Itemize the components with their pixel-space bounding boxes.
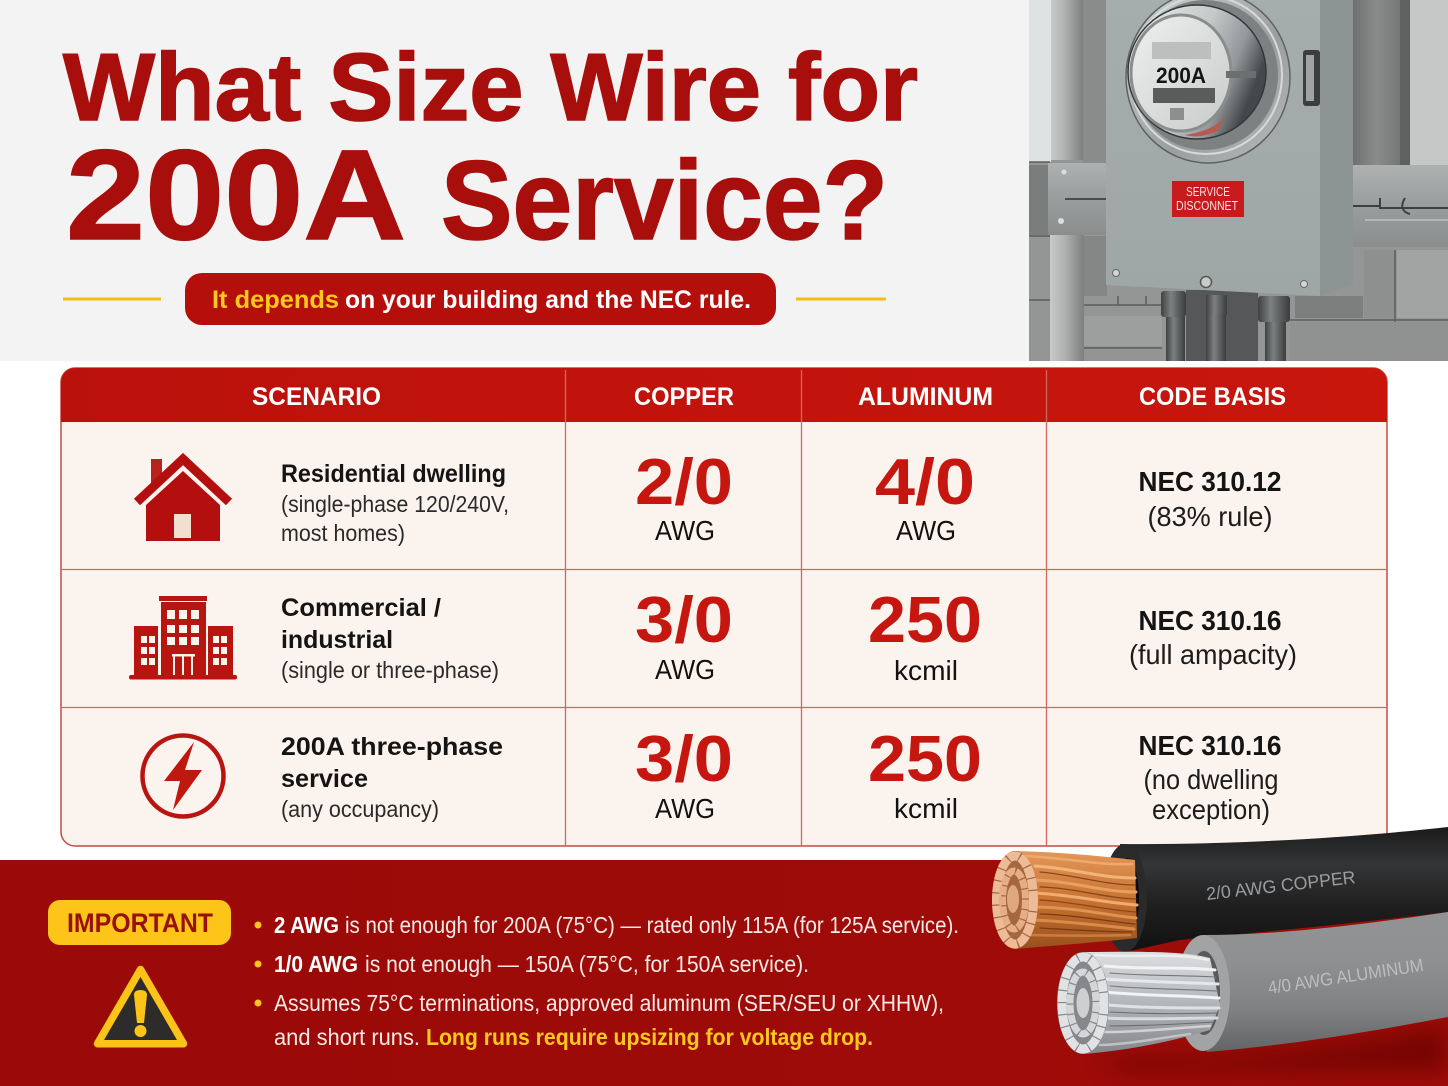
table [61,368,1387,846]
latch [1303,50,1320,106]
row: residential dwelling: (83% rule) [1148,501,1272,532]
important notes list: is not enough for 200A (75°C) — rated only 115A (for 125A service). [345,912,959,938]
cable: 4/0 AWG aluminum [1057,912,1448,1054]
row: commercial / industrial: 250 [868,583,982,656]
row: commercial / industrial: kcmil [894,655,958,686]
important notes list: is not enough — 150A (75°C, for 150A service). [365,951,809,977]
row: 200A three-phase service: exception) [1152,794,1270,825]
row: commercial / industrial: industrial [281,626,393,654]
important badge: IMPORTANT [67,908,213,938]
important notes list: 1/0 AWG [274,951,358,977]
row: 200A three-phase service: 250 [868,722,982,795]
title: 200A [66,124,406,267]
row: 200A three-phase service: AWG [655,793,715,824]
row: residential dwelling: AWG [896,515,956,546]
photo: 200A meter and service disconnect: 200A [1156,63,1206,88]
row: commercial / industrial: (single or three-phase) [281,657,499,683]
row: 200A three-phase service: (no dwelling [1144,764,1278,795]
subtitle pill [63,273,886,325]
important notes list: 2 AWG [274,912,339,938]
subtitle pill: It depends [212,286,339,314]
icon: warning triangle [98,970,184,1044]
row: residential dwelling: 2/0 [635,445,733,518]
row: 200A three-phase service: kcmil [894,793,958,824]
photo: 200A meter and service disconnect: DISCONNET [1176,198,1238,213]
row: commercial / industrial [129,583,1297,686]
row: 200A three-phase service: 3/0 [635,722,733,795]
brick wall [1029,162,1448,361]
photo: 200A meter and service disconnect [1029,0,1448,361]
row: 200A three-phase service: 200A three-phase [281,733,503,761]
row: commercial / industrial: 3/0 [635,583,733,656]
icon: lightning bolt in circle [142,736,224,816]
cable shadow [1100,1025,1448,1072]
cable: 4/0 AWG aluminum: 4/0 AWG ALUMINUM [1267,955,1425,998]
row: residential dwelling [137,445,1282,546]
meter [1126,0,1290,163]
row: commercial / industrial: (full ampacity) [1129,639,1297,670]
bottom band [0,860,1448,1086]
photo: 200A meter and service disconnect: SERVICE [1186,184,1230,199]
row: commercial / industrial: NEC 310.16 [1138,605,1282,636]
cable: 2/0 AWG copper [992,827,1448,952]
row: commercial / industrial: AWG [655,654,715,685]
important notes list: and short runs. [274,1024,420,1050]
table header row [61,368,1387,422]
cable: 2/0 AWG copper: 2/0 AWG COPPER [1205,867,1356,904]
table header row: ALUMINUM [858,383,993,411]
row: residential dwelling: NEC 310.12 [1138,466,1282,497]
row: 200A three-phase service: NEC 310.16 [1138,730,1282,761]
title: Service? [441,138,888,263]
icon: house [137,459,229,541]
title [63,34,918,267]
row: residential dwelling: most homes) [281,520,405,546]
subtitle pill: on your building and the NEC rule. [345,286,751,314]
title: What Size Wire for [63,34,918,141]
row: 200A three-phase service: service [281,765,368,793]
table header row: SCENARIO [252,383,381,411]
important notes list: Assumes 75°C terminations, approved aluminum (SER/SEU or XHHW), [274,990,944,1016]
brackets [1048,163,1108,235]
row: residential dwelling: AWG [655,515,715,546]
important notes list [254,912,959,1050]
enclosure [1337,165,1353,238]
row: residential dwelling: Residential dwelling [281,460,506,488]
row: residential dwelling: 4/0 [875,445,975,518]
table header row: CODE BASIS [1139,383,1286,411]
header background [0,0,1030,361]
important notes list: Long runs require upsizing for voltage drop. [426,1024,873,1050]
row: residential dwelling: (single-phase 120/240V, [281,491,509,517]
icon: building [129,596,237,680]
conduits [1186,290,1258,361]
service disconnect label [1172,181,1244,217]
table header row: COPPER [634,383,734,411]
row: 200A three-phase service [142,722,1282,825]
row: 200A three-phase service: (any occupancy) [281,796,439,822]
row: commercial / industrial: Commercial / [281,594,441,622]
important badge [48,900,231,945]
